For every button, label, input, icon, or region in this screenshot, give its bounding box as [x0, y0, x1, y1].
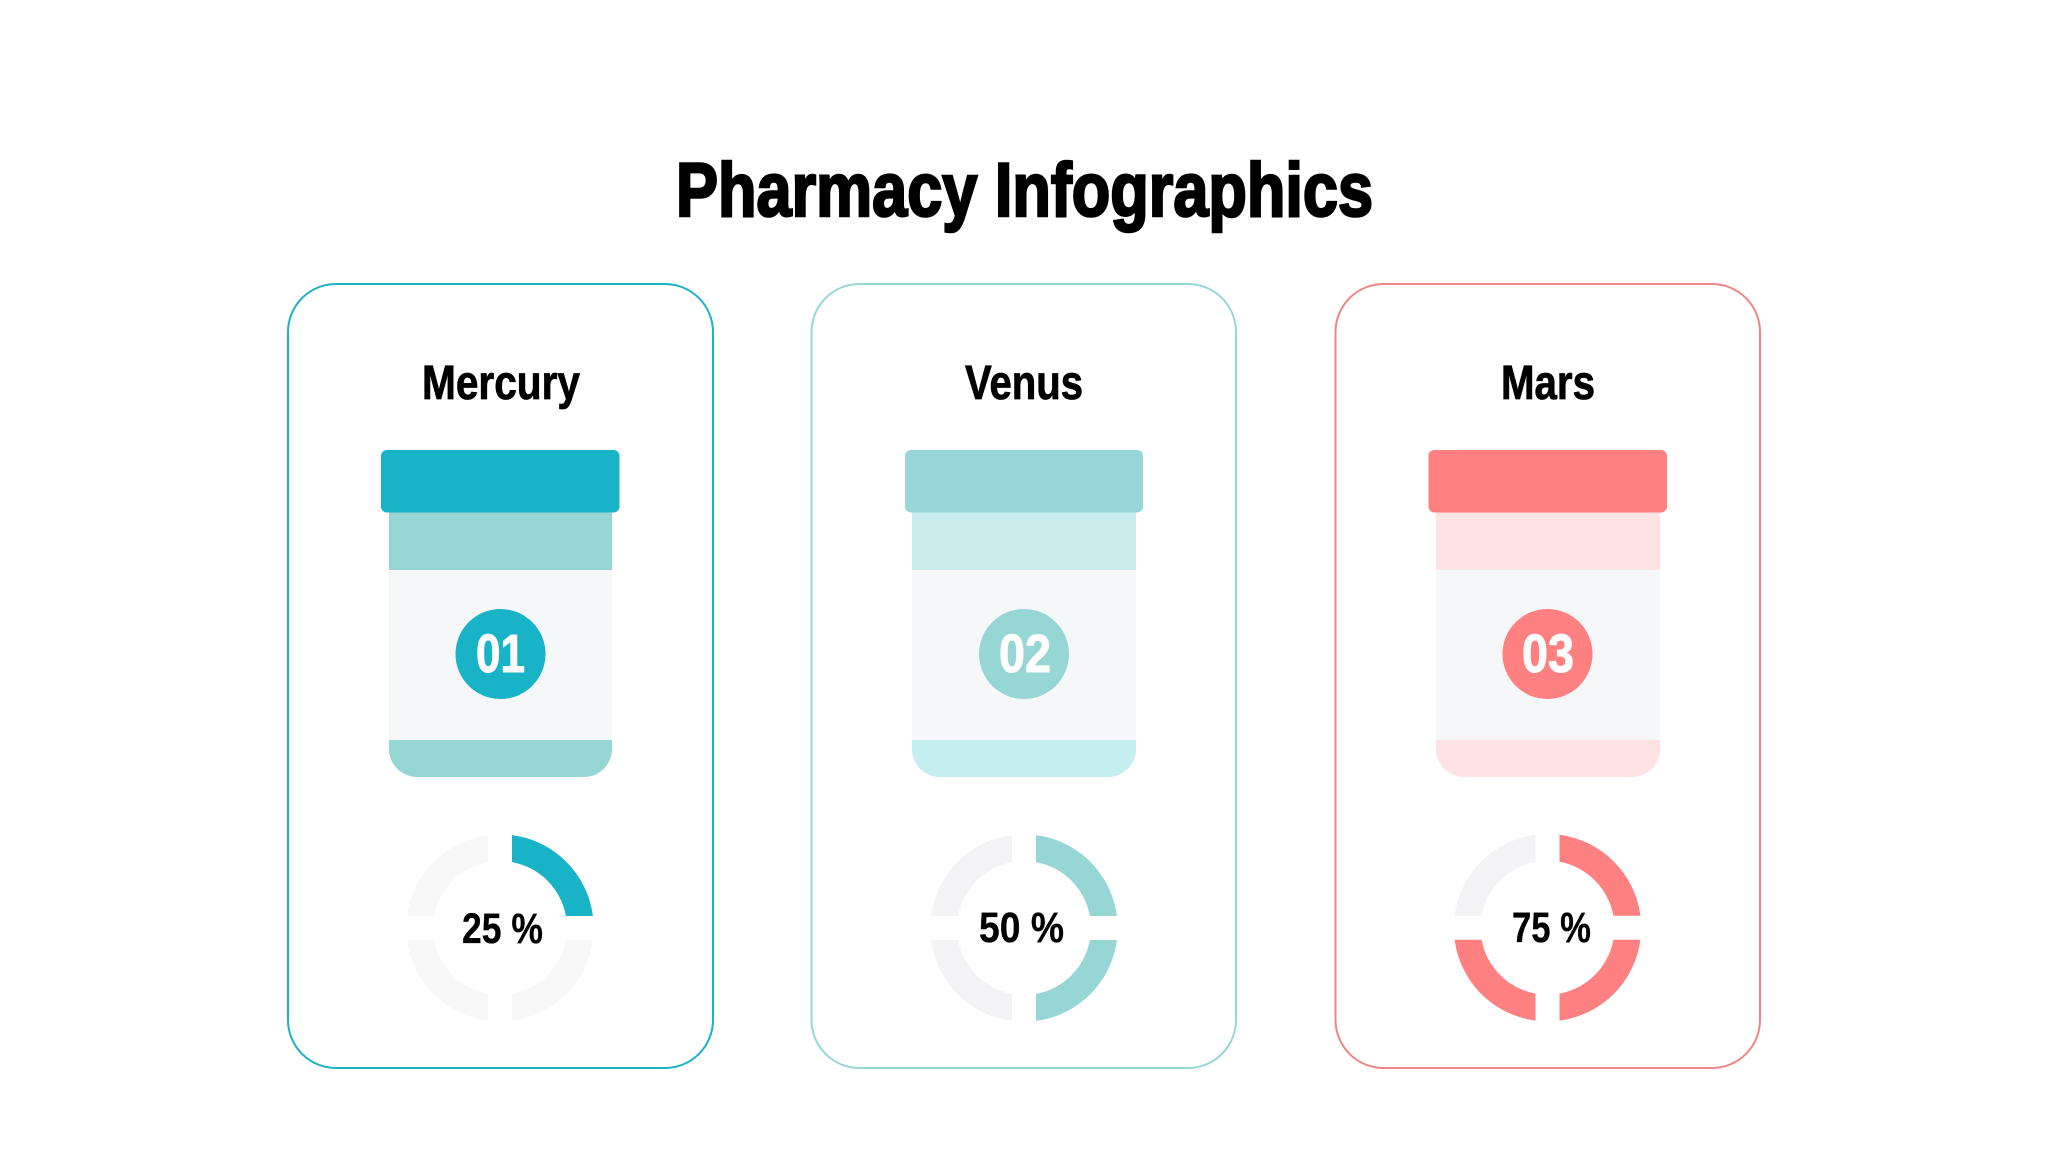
title: Pharmacy Infographics	[676, 148, 1373, 233]
icon: jar 03	[1428, 450, 1667, 777]
panel: Mercury	[288, 284, 713, 1068]
chart: 75 percent donut: 75 %	[1512, 904, 1591, 952]
chart: 25 percent donut	[407, 835, 593, 1021]
chart: 25 percent donut: 25 %	[462, 905, 543, 953]
chart: 50 percent donut	[931, 835, 1117, 1021]
icon: jar 02	[905, 450, 1143, 777]
chart: 50 percent donut: 50 %	[979, 904, 1064, 952]
heading: Venus: Venus	[965, 357, 1083, 410]
icon: jar 01	[381, 450, 620, 777]
heading: Mars: Mars	[1501, 357, 1595, 410]
panel: Venus	[812, 284, 1236, 1068]
heading: Mercury: Mercury	[422, 357, 580, 410]
icon: jar 01: 01	[476, 624, 525, 684]
icon: jar 02: 02	[999, 624, 1051, 684]
chart: 75 percent donut	[1455, 835, 1640, 1021]
icon: jar 03: 03	[1522, 624, 1574, 684]
panel: Mars	[1336, 284, 1760, 1068]
